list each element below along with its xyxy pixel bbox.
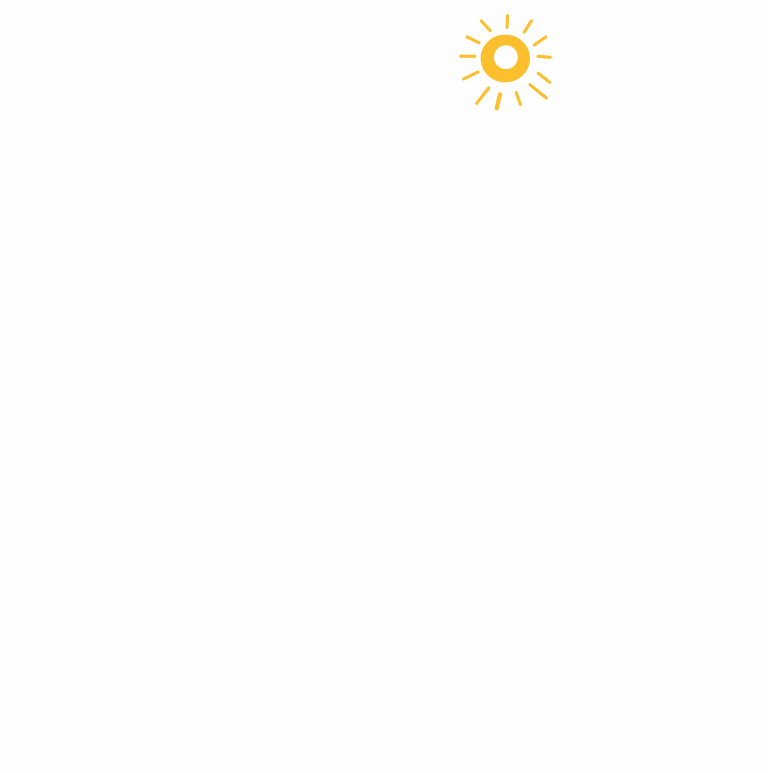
sun ring bbox=[481, 35, 530, 82]
icon: sun bbox=[461, 16, 550, 108]
sun rays bbox=[461, 16, 550, 108]
